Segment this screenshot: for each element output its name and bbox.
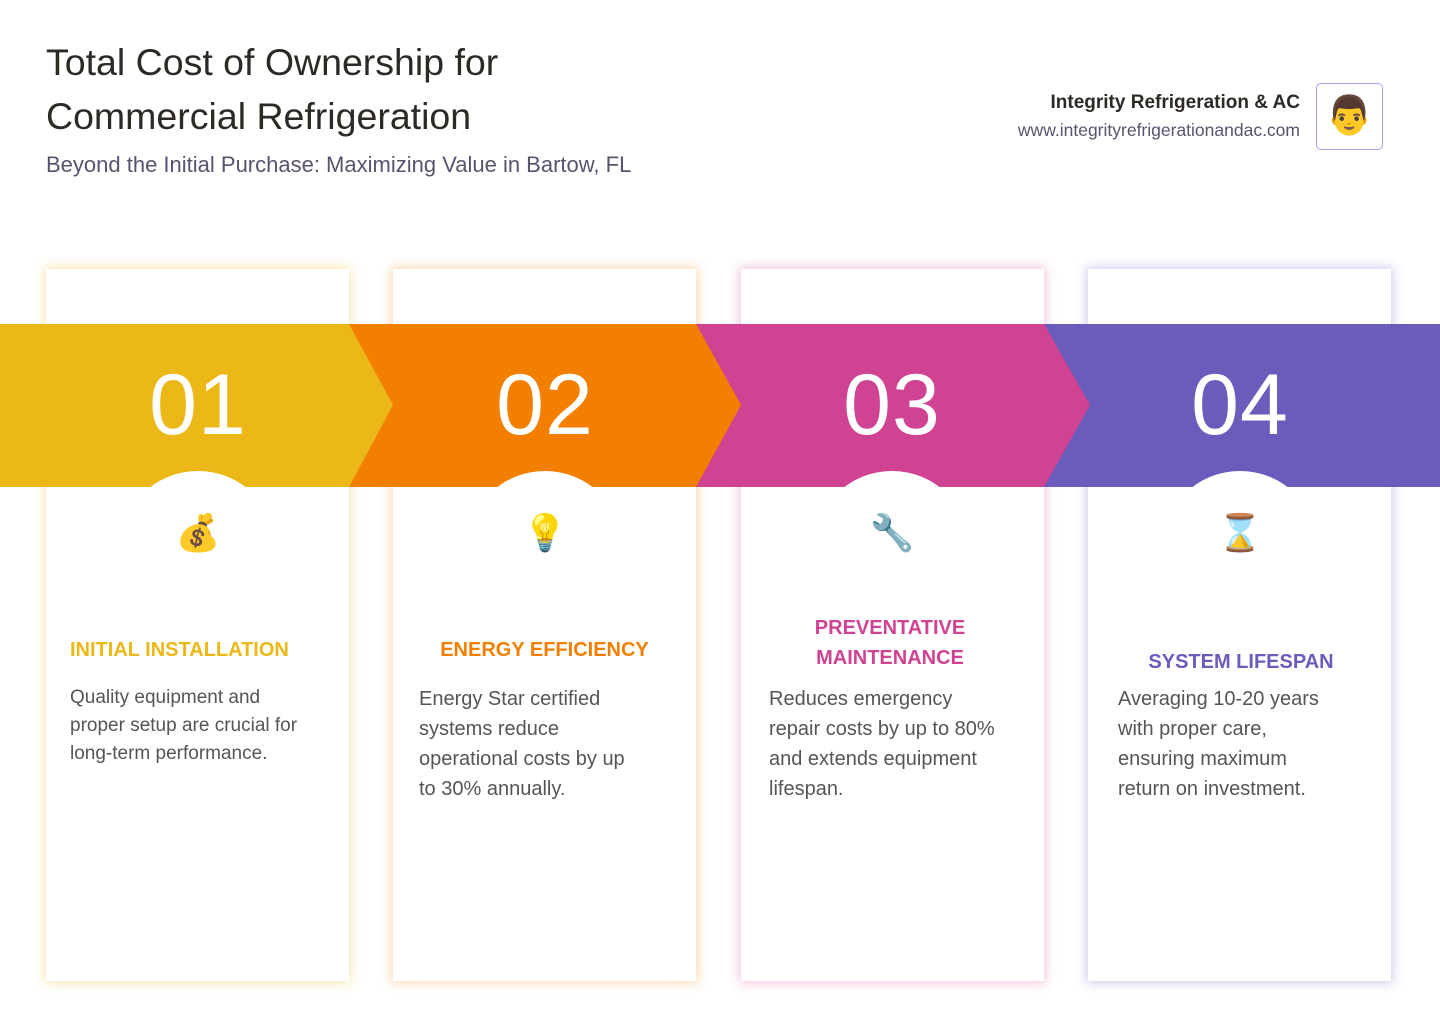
number 04: 04 [1191, 357, 1289, 453]
number 03: 03 [843, 357, 941, 453]
card 3 [741, 269, 1044, 981]
number 02: 02 [496, 357, 594, 453]
card 1 [46, 269, 349, 981]
title: Commercial Refrigeration [46, 95, 471, 137]
website: www.integrityrefrigerationandac.com [1018, 120, 1300, 140]
text 3: Reduces emergency repair costs by up to 80% and extends equipment lifespan. [769, 688, 995, 800]
icon: hourglass: ⌛ [1218, 512, 1262, 553]
number 01: 01 [149, 357, 247, 453]
icon: money bag: 💰 [176, 512, 220, 553]
heading 4: SYSTEM LIFESPAN [1148, 651, 1334, 673]
company name: Integrity Refrigeration & AC [1050, 92, 1300, 113]
text 2: Energy Star certified systems reduce operational costs by up to 30% annually. [419, 688, 625, 800]
title: Total Cost of Ownership for [46, 41, 498, 83]
card 2 [393, 269, 696, 981]
text 4: Averaging 10-20 years with proper care, ensuring maximum return on investment. [1118, 688, 1319, 800]
heading 3: MAINTENANCE [816, 647, 964, 669]
icon: light bulb: 💡 [523, 512, 567, 553]
subtitle: Beyond the Initial Purchase: Maximizing Value in Bartow, FL [46, 152, 631, 177]
heading 1: INITIAL INSTALLATION [70, 639, 289, 661]
heading 2: ENERGY EFFICIENCY [440, 639, 649, 661]
logo [1316, 83, 1383, 150]
logo: 👨 [1326, 95, 1373, 137]
heading 3 [815, 617, 965, 669]
icon: wrench: 🔧 [870, 512, 914, 553]
brand block [1018, 83, 1383, 150]
text 1: Quality equipment and proper setup are crucial for long-term performance. [70, 687, 297, 764]
card 4 [1088, 269, 1391, 981]
heading 3: PREVENTATIVE [815, 617, 965, 639]
title [46, 41, 498, 137]
